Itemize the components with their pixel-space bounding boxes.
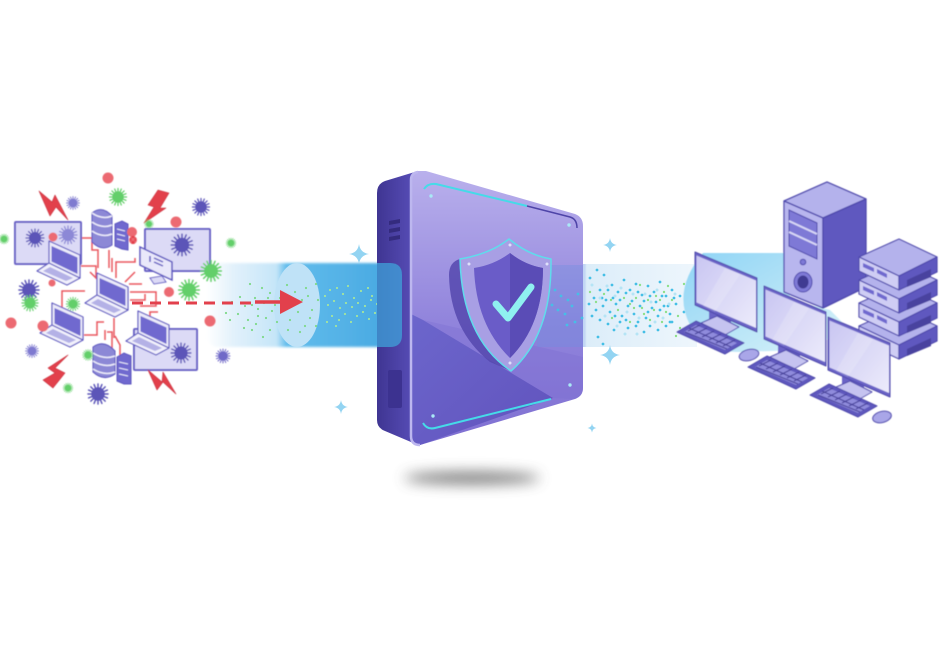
security appliance [377, 171, 583, 445]
lightning bolts [39, 190, 176, 394]
right traffic band [537, 264, 697, 347]
cyan light strips [424, 184, 527, 206]
monitor with virus: top left [15, 222, 81, 264]
workstation 1 [677, 252, 760, 363]
server tower: bottom [117, 353, 131, 384]
database: top [92, 210, 112, 248]
sparkles [334, 238, 620, 432]
laptop: centre [85, 273, 128, 317]
compromised network cluster [0, 172, 236, 404]
green virus icons [0, 188, 236, 393]
red threat dots [6, 172, 216, 332]
server tower: top [115, 221, 128, 250]
left traffic band [206, 263, 402, 347]
laptop: lower left [40, 303, 83, 347]
blue glow behind workstations [683, 253, 850, 352]
monitor with virus: top right [145, 229, 210, 271]
right band tint over face [537, 265, 583, 347]
appliance ground shadow [404, 472, 540, 484]
check mark [496, 287, 531, 318]
band passing through side [377, 263, 402, 347]
server stack [859, 239, 937, 359]
red network traces [62, 238, 158, 355]
small monitor [140, 247, 172, 284]
port [388, 370, 402, 408]
tower computer [784, 182, 866, 308]
workstation 2 [748, 286, 826, 389]
shield emblem [449, 239, 551, 371]
monitor with virus: bottom right [134, 329, 197, 370]
appliance front face [411, 171, 583, 445]
right blue and green particles [552, 270, 684, 344]
red attack arrow [132, 290, 303, 314]
red cross marker [130, 236, 136, 244]
left green particles [226, 284, 318, 337]
vents [389, 219, 400, 241]
purple virus icons [19, 197, 230, 404]
screws [429, 194, 572, 418]
protected network [677, 182, 937, 425]
workstation 3 [810, 317, 893, 425]
appliance side panel [377, 171, 418, 445]
database: bottom [93, 344, 115, 378]
laptop: lower right [126, 311, 169, 355]
laptop: top left [37, 241, 80, 285]
